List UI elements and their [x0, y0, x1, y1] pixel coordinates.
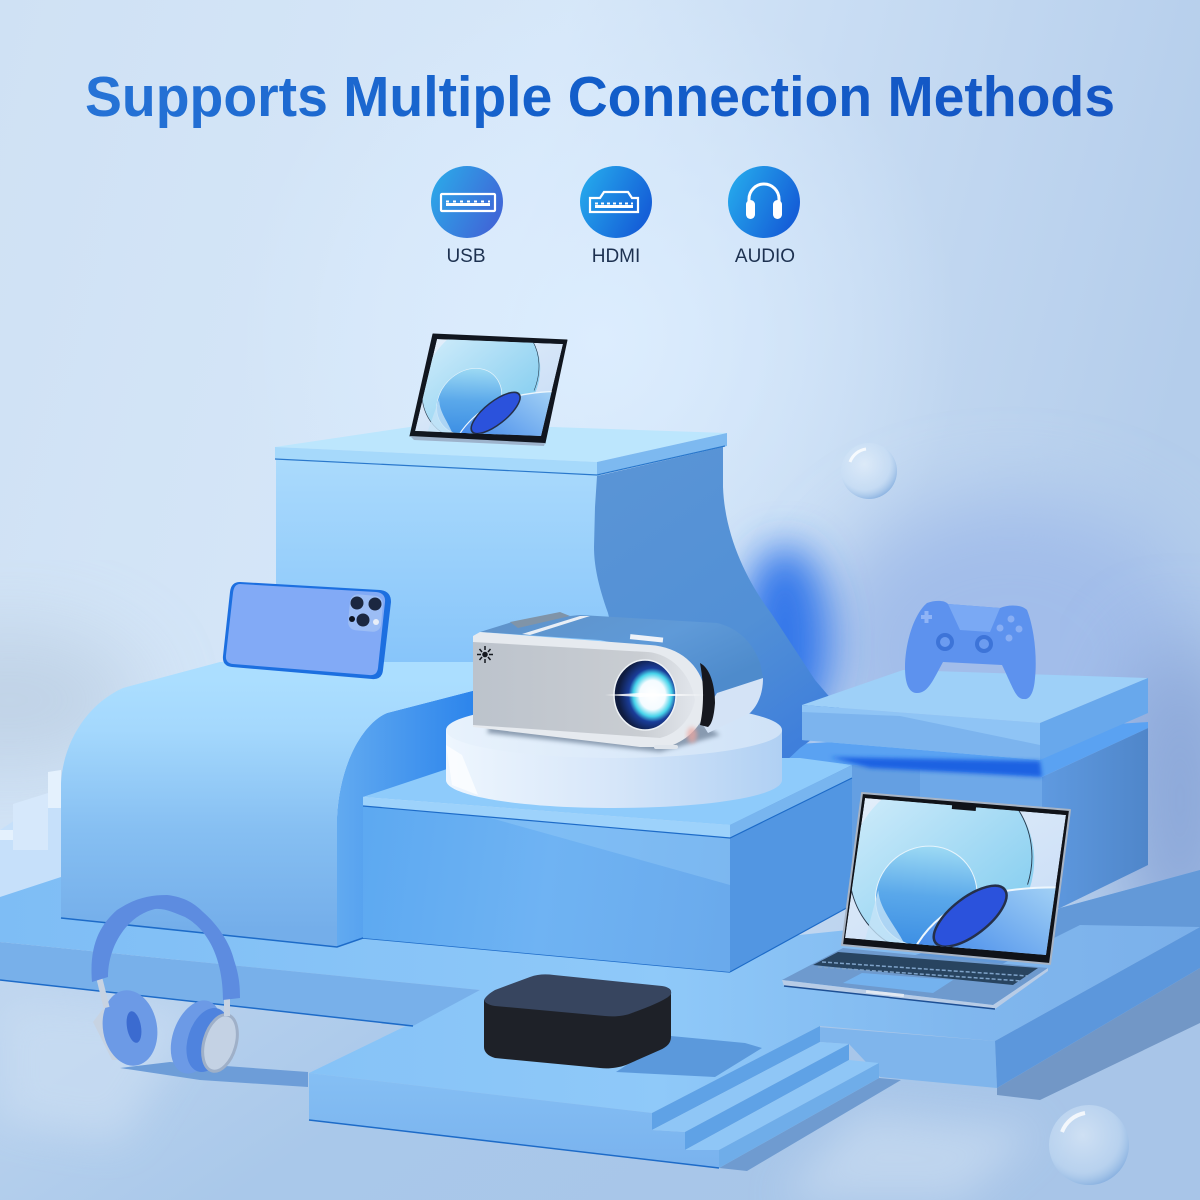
projector white lower shell: [700, 678, 763, 733]
laptop base: [782, 948, 1048, 1005]
left small steps: [0, 770, 61, 905]
rolled front: [61, 662, 476, 947]
flower logo: [477, 646, 493, 663]
floor: [0, 960, 1200, 1200]
upper block: [275, 423, 845, 765]
platform front face: [309, 1073, 719, 1168]
game controller: [905, 601, 1036, 699]
right raised block under laptop: [782, 722, 1148, 925]
bubble top right: [841, 443, 897, 499]
top face and slab: [275, 423, 727, 462]
lens: [614, 660, 676, 730]
control buttons: [510, 612, 570, 628]
side vent: [700, 663, 715, 727]
label: HDMI: HDMI: [592, 246, 640, 267]
bubble bottom right: [1049, 1105, 1129, 1185]
base platform slab: [0, 870, 1200, 1113]
projector: [473, 612, 763, 752]
large rounded block: [61, 662, 730, 972]
headband: [92, 895, 240, 1000]
label: AUDIO: AUDIO: [735, 246, 795, 267]
feet: [654, 745, 678, 749]
front face: [276, 459, 660, 690]
icon: USB: [431, 166, 503, 238]
icon: HDMI: [580, 166, 652, 238]
cove side face: [594, 447, 845, 765]
projector silver front: [473, 642, 695, 738]
projector blue shell: [480, 615, 763, 693]
label: USB: USB: [446, 246, 486, 267]
laptop platform faces: [818, 927, 1200, 1088]
lens flare: [605, 693, 705, 697]
icon: AUDIO: [728, 166, 800, 238]
stair shadow: [719, 1078, 901, 1171]
laptop lid: [842, 793, 1070, 964]
right earcup: [161, 993, 243, 1081]
headphones: [92, 895, 308, 1087]
headphone shadow: [120, 1062, 308, 1087]
title: Supports Multiple Connection Methods: [85, 65, 1115, 129]
turntable disc: [446, 702, 782, 808]
left earcup: [93, 986, 163, 1070]
lower platform with steps: [309, 1026, 901, 1171]
projector silver rim: [473, 632, 705, 747]
slab under controller: [802, 670, 1148, 777]
tablet: [410, 318, 571, 446]
phone: [223, 582, 391, 679]
laptop: [782, 766, 1075, 1009]
laptop screen: [837, 766, 1075, 966]
media box shadow: [616, 1036, 762, 1077]
middle block: [363, 758, 852, 972]
right side face: [337, 690, 476, 947]
top stripe: [522, 616, 590, 635]
projector shadow: [487, 722, 720, 752]
phone camera: [347, 594, 384, 632]
wall shadow behind the cove: [740, 545, 830, 735]
black media box: [484, 974, 671, 1068]
